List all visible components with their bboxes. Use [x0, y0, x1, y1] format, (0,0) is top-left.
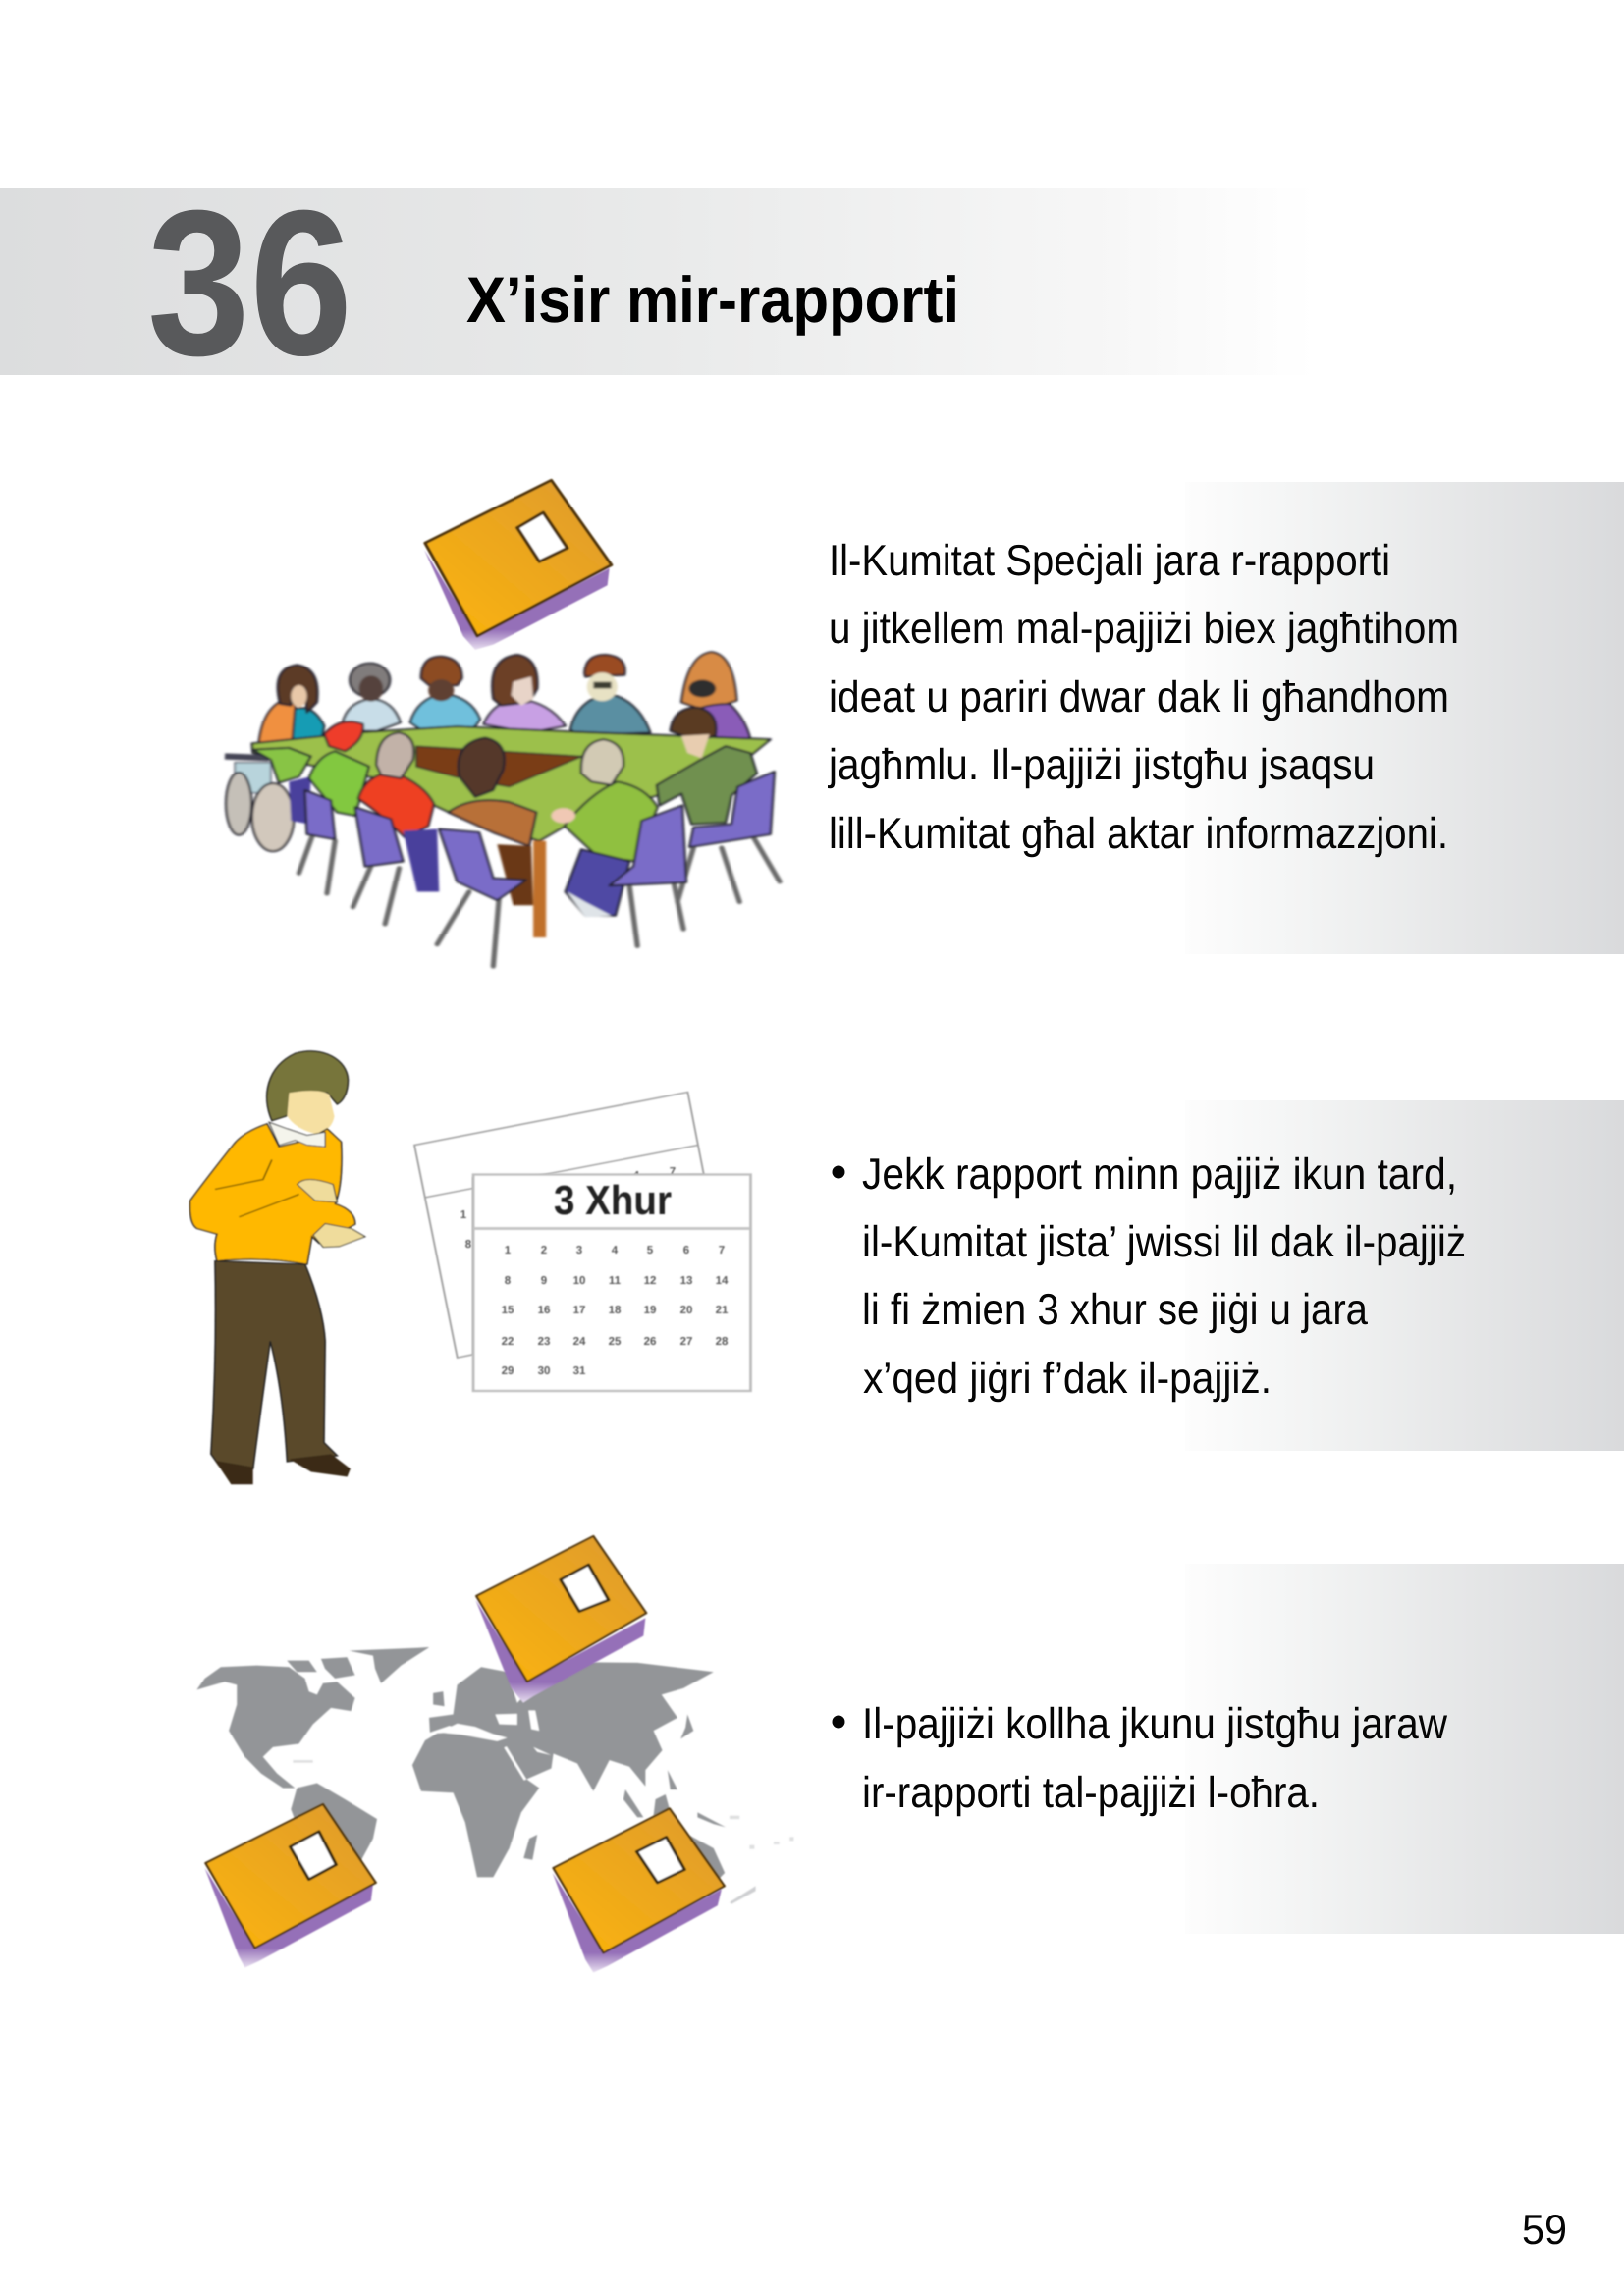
paragraph: other reports — [862, 1700, 1448, 1817]
page number: 59 — [1522, 2207, 1567, 2254]
islands: Madagascar, Japan, UK, Indonesia, Australia — [433, 1691, 726, 1885]
calendar days: 4 — [612, 1245, 619, 1256]
paragraph: committee: lill-Kumitat għal aktar informazzjoni. — [829, 810, 1448, 858]
face — [287, 1091, 335, 1134]
sea gaps — [439, 1710, 551, 1755]
illustration: world map — [196, 1647, 793, 1904]
North America — [196, 1666, 355, 1788]
bullet — [833, 1166, 844, 1178]
chairs — [305, 772, 775, 937]
calendar days: 31 — [573, 1365, 586, 1377]
panel: late report text — [833, 1100, 1624, 1451]
South America — [291, 1783, 377, 1868]
scattered islands — [730, 1886, 756, 1904]
illustration: report book above meeting — [424, 480, 612, 650]
paragraph: late report: x’qed jiġri f’dak il-pajjiż. — [863, 1355, 1272, 1403]
front calendar sheet — [473, 1175, 750, 1391]
icon: report book left — [205, 1804, 376, 1968]
icon: report book top — [475, 1536, 646, 1703]
paragraph: committee: jagħmlu. Il-pajjiżi jistgħu jsaqsu — [827, 741, 1375, 789]
calendar days: 23 — [538, 1336, 550, 1348]
calendar days: 13 — [680, 1275, 692, 1287]
paragraph: committee: u jitkellem mal-pajjiżi biex jagħtihom — [829, 605, 1459, 653]
calendar days: 8 — [505, 1275, 512, 1287]
paragraph: committee — [827, 537, 1459, 858]
panel: other reports text — [833, 1564, 1624, 1934]
calendar days: 9 — [541, 1275, 547, 1287]
paragraph: late report: il-Kumitat jista’ jwissi lil dak il-pajjiż — [862, 1218, 1466, 1266]
calendar days — [502, 1245, 729, 1377]
Eurasia with Arabia — [429, 1662, 714, 1791]
section number: 36 — [147, 167, 352, 399]
Arctic islands and Greenland — [287, 1647, 429, 1683]
paragraph: late report: Jekk rapport minn pajjiż ikun tard, — [862, 1150, 1457, 1199]
collar — [269, 1122, 325, 1147]
illustration: man looking at watch — [190, 1051, 365, 1484]
calendar heading: 3 Xhur — [554, 1177, 672, 1223]
calendar days: 5 — [647, 1245, 654, 1256]
arm fold — [215, 1160, 299, 1217]
trousers — [211, 1261, 337, 1468]
calendar days: 25 — [609, 1336, 622, 1348]
calendar days: 21 — [716, 1305, 729, 1316]
back calendar numbers: 1 — [460, 1209, 467, 1221]
paragraph: committee: Il-Kumitat Speċjali jara r-rapporti — [829, 537, 1390, 585]
front row people — [253, 707, 757, 917]
back calendar numbers — [460, 1166, 676, 1251]
calendar days: 24 — [573, 1336, 586, 1348]
header band — [0, 167, 1316, 399]
back calendar numbers: 4 — [633, 1170, 640, 1182]
Africa — [412, 1731, 539, 1877]
illustration: committee meeting — [225, 652, 780, 966]
calendar days: 22 — [502, 1336, 514, 1348]
panel: committee text — [827, 482, 1624, 954]
sweater — [190, 1124, 355, 1264]
back row people — [259, 652, 750, 743]
paragraph: late report — [862, 1150, 1466, 1403]
back calendar numbers: 7 — [670, 1166, 676, 1178]
calendar days: 20 — [680, 1305, 692, 1316]
title: X’isir mir-rapporti — [466, 263, 959, 336]
calendar days: 10 — [573, 1275, 585, 1287]
paragraph: committee: ideat u pariri dwar dak li għandhom — [829, 673, 1449, 721]
calendar days: 19 — [644, 1305, 656, 1316]
calendar days: 18 — [609, 1305, 622, 1316]
chair legs — [298, 834, 780, 966]
icon: report book right — [553, 1808, 725, 1973]
calendar days: 6 — [683, 1245, 689, 1256]
paragraph: other reports: ir-rapporti tal-pajjiżi l-oħra. — [862, 1769, 1320, 1817]
back calendar sheet — [414, 1093, 704, 1358]
hair — [267, 1051, 348, 1121]
calendar days: 17 — [573, 1305, 585, 1316]
calendar days: 2 — [541, 1245, 547, 1256]
back calendar numbers: 8 — [465, 1239, 472, 1251]
paragraph: other reports: Il-pajjiżi kollha jkunu jistgħu jaraw — [862, 1700, 1448, 1748]
bullet — [833, 1716, 844, 1728]
calendar days: 16 — [538, 1305, 550, 1316]
calendar days: 26 — [644, 1336, 656, 1348]
table top — [252, 726, 771, 841]
calendar days: 30 — [538, 1365, 550, 1377]
wheelchair — [225, 756, 294, 851]
paragraph: late report: li fi żmien 3 xhur se jiġi u jara — [862, 1286, 1368, 1334]
shoes — [215, 1454, 351, 1484]
calendar days: 12 — [644, 1275, 656, 1287]
calendar days: 15 — [502, 1305, 514, 1316]
Red Sea — [506, 1747, 525, 1780]
calendar days: 11 — [609, 1275, 622, 1287]
illustration: calendar 3 months — [414, 1093, 750, 1391]
calendar days: 29 — [502, 1365, 514, 1377]
calendar days: 7 — [719, 1245, 725, 1256]
calendar days: 28 — [716, 1336, 729, 1348]
hands — [298, 1180, 365, 1247]
calendar days: 3 — [576, 1245, 582, 1256]
calendar days: 1 — [505, 1245, 512, 1256]
calendar days: 27 — [680, 1336, 692, 1348]
calendar days: 14 — [716, 1275, 729, 1287]
